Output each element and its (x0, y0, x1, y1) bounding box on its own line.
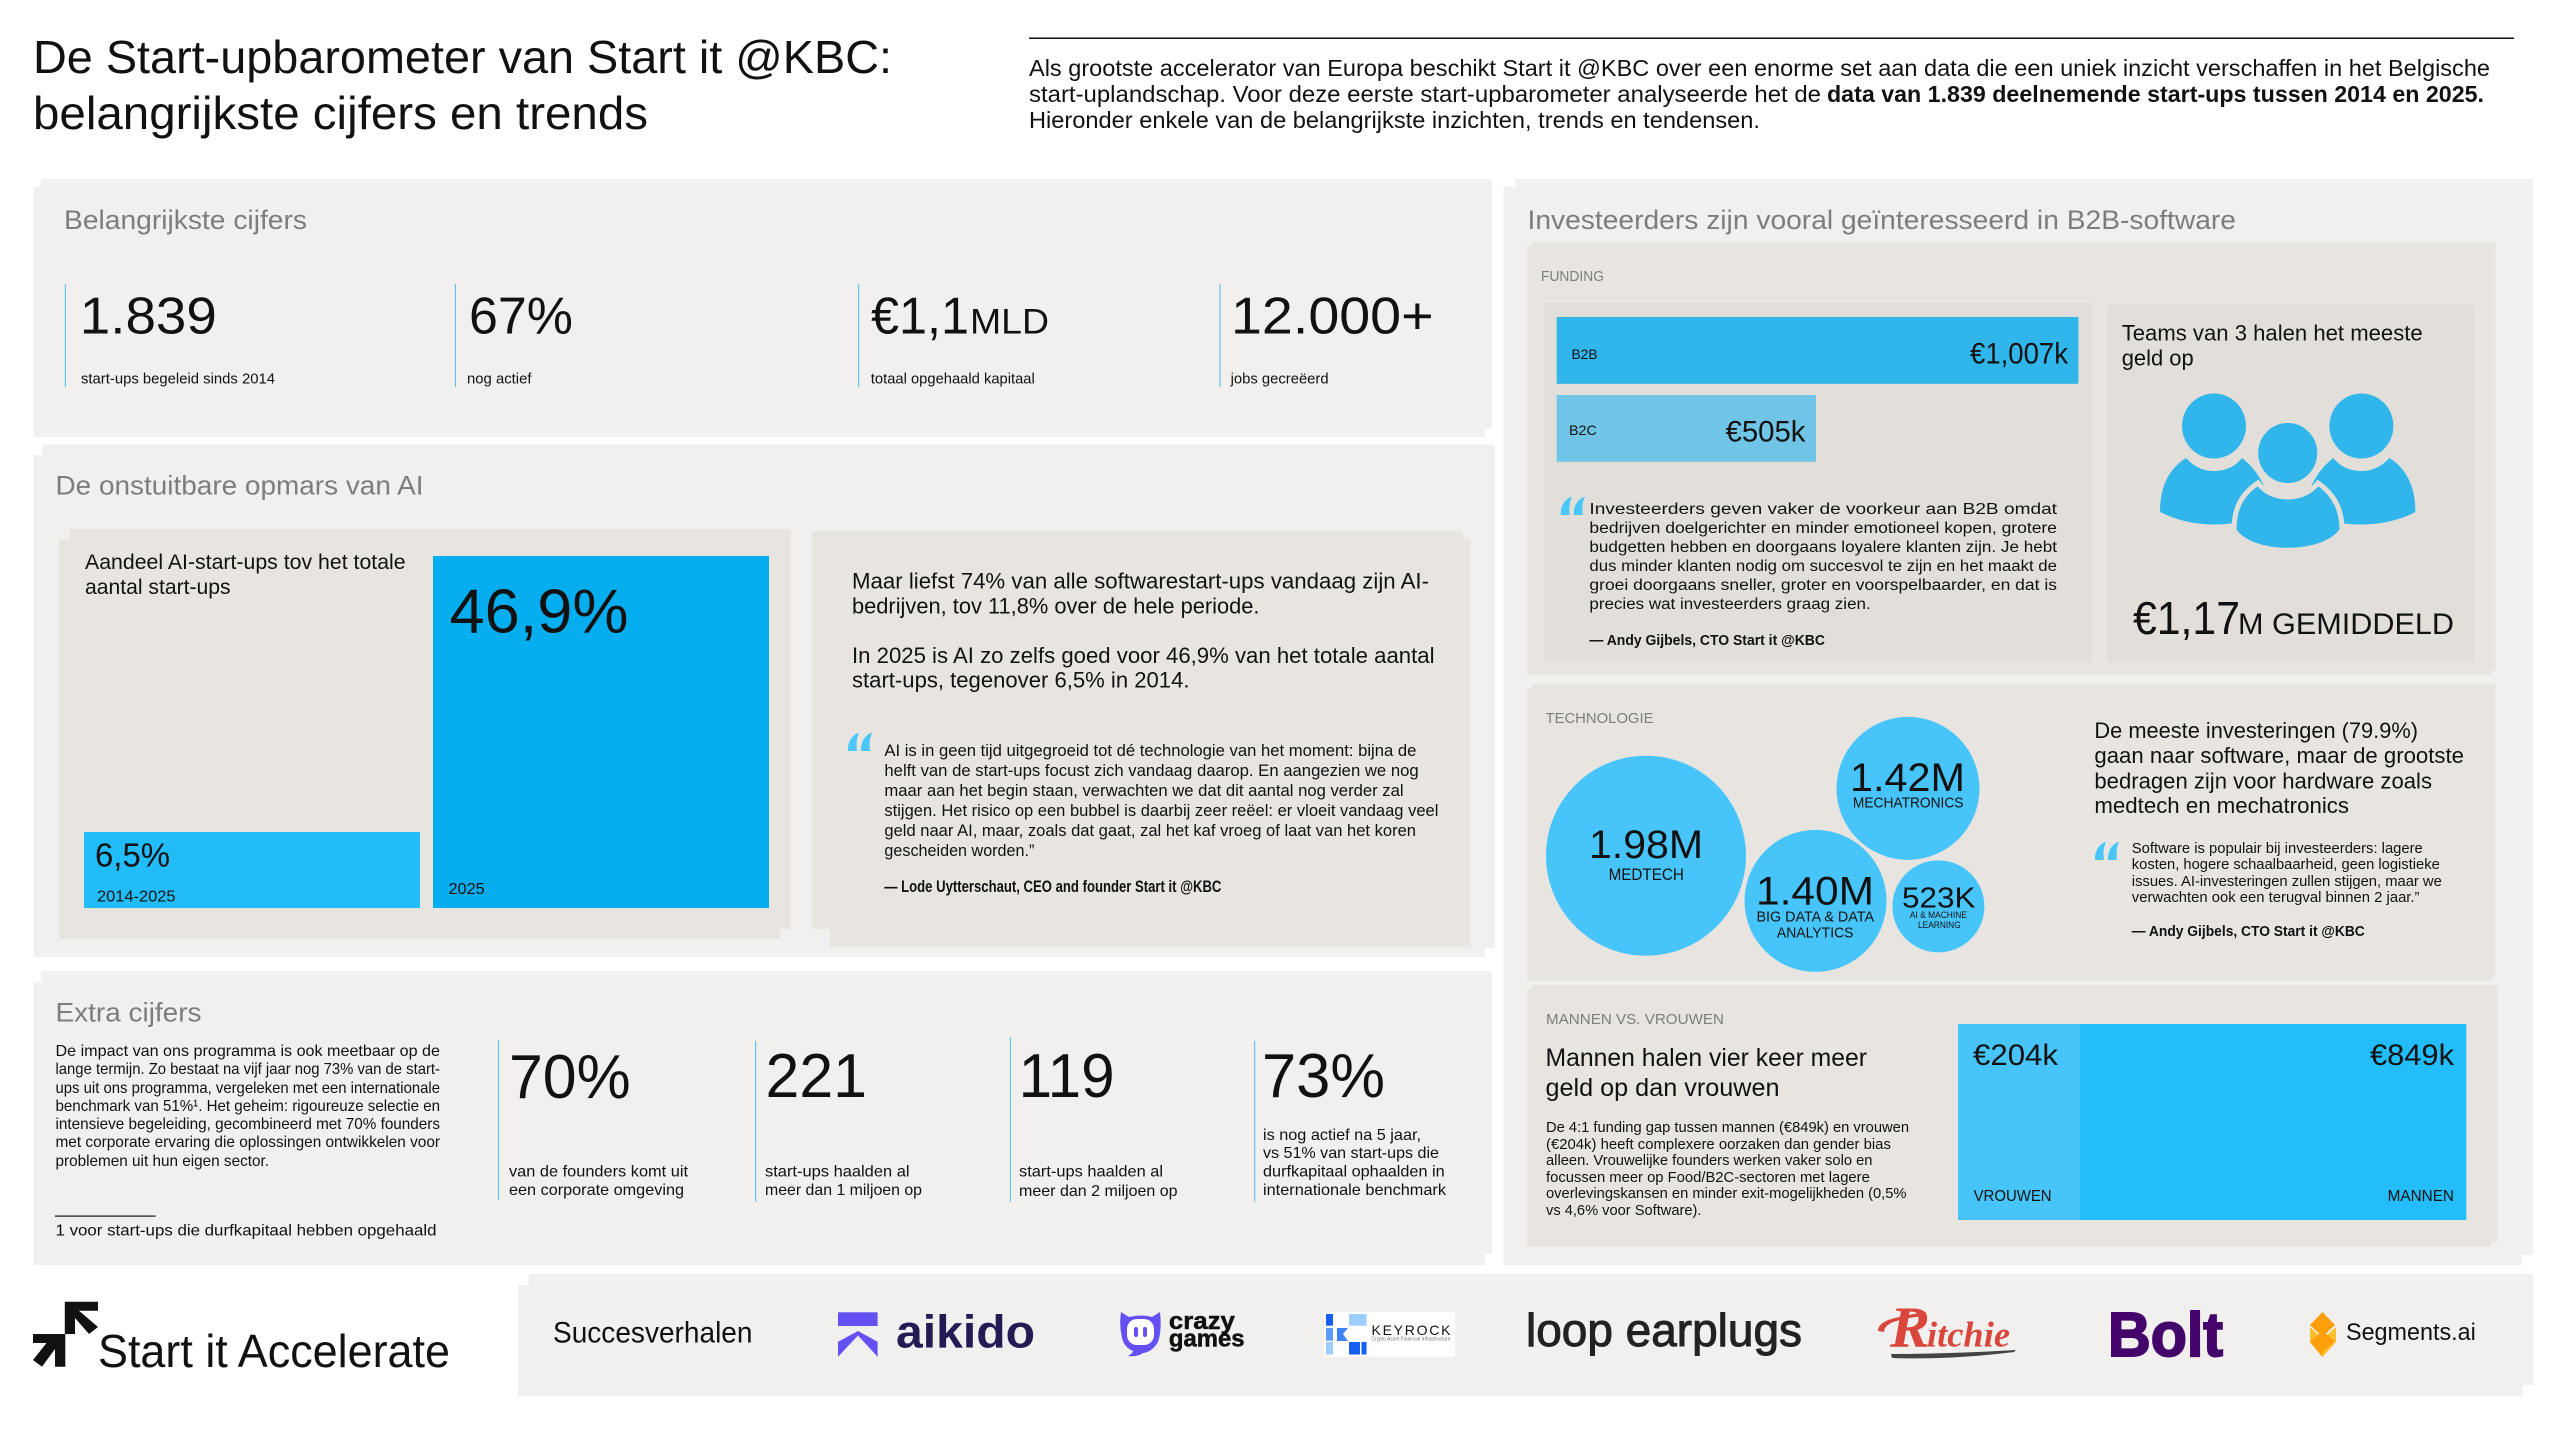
bar: vrouwen (1958, 1024, 2080, 1220)
text: investeringen software (2094, 718, 2464, 818)
stat: 73%: internationale benchmark (1263, 1182, 1447, 1199)
stat: 12.000+: jobs gecreëerd (1230, 371, 1329, 387)
icon: arrows (33, 1302, 98, 1367)
bar: B2B: €1,007k (1970, 337, 2069, 370)
text block: funding gap: De 4:1 funding gap tussen mannen (€849k) en vrouwen (1546, 1119, 1909, 1136)
text block: impact: lange termijn. Zo bestaat na vijf jaar nog 73% van de start- (56, 1061, 440, 1078)
stat: 221: meer dan 1 miljoen op (765, 1182, 922, 1199)
stat: 67% (455, 284, 573, 387)
panel: technologie (1527, 684, 2495, 980)
chart caption: Aandeel AI-start-ups tov het totale (85, 551, 406, 574)
icon: quote mark (848, 733, 872, 751)
text block: funding gap: (€204k) heeft complexere oorzaken dan gender bias (1546, 1136, 1891, 1153)
text: investeringen software: bedragen zijn voor hardware zoals (2094, 768, 2432, 793)
intro text: start-uplandschap. Voor deze eerste start-upbarometer analyseerde het de (1029, 81, 1821, 107)
text block: impact (56, 1043, 441, 1170)
logo: bolt: Bolt (2108, 1301, 2223, 1370)
stat: 70%: een corporate omgeving (509, 1182, 684, 1199)
bubble: big data: ANALYTICS (1777, 924, 1854, 942)
bubble: big data (1744, 830, 1886, 972)
stat: gemiddeld bedrag: €1,17 (2133, 592, 2240, 644)
panel: teams van 3 (2107, 305, 2474, 662)
stat: 1,1 miljard (859, 284, 1049, 387)
bar: B2C: €505k (1726, 416, 1806, 448)
stat: 73%: vs 51% van start-ups die (1263, 1145, 1439, 1162)
stat: gemiddeld bedrag (2133, 592, 2454, 644)
icon: quote mark (2095, 842, 2119, 860)
title: De Start-upbarometer van Start it @KBC: (33, 31, 892, 83)
logo: Start it Accelerate (33, 1302, 450, 1377)
intro text (1029, 38, 2514, 133)
bar: vrouwen: VROUWEN (1974, 1188, 2052, 1205)
panel: funding (1527, 242, 2496, 675)
text block: funding gap: focussen meer op Food/B2C-sectoren met lagere (1546, 1169, 1870, 1186)
bubble: AI: AI & MACHINE (1910, 910, 1967, 921)
intro text: data van 1.839 deelnemende start-ups tussen 2014 en 2025. (1827, 81, 2484, 107)
quote: Andy Gijbels technologie: issues. AI-investeringen zullen stijgen, maar we (2132, 874, 2442, 890)
bar: mannen: MANNEN (2388, 1188, 2454, 1205)
stat: 67%: 67% (469, 287, 573, 345)
logo: keyrock: Crypto Asset Financial Infrastructure (1372, 1336, 1451, 1342)
stat: 70%: 70% (509, 1043, 631, 1112)
bubble: AI: LEARNING (1918, 920, 1961, 931)
stat: 67%: nog actief (467, 371, 532, 387)
text block: impact: problemen uit hun eigen sector. (56, 1153, 269, 1170)
logo: crazy games (1120, 1308, 1244, 1356)
bar: B2B: B2B (1572, 346, 1598, 362)
logo: aikido: aikido (896, 1306, 1035, 1358)
text: teams van 3: Teams van 3 halen het meeste (2122, 320, 2423, 345)
stat: 12.000+: 12.000+ (1231, 287, 1434, 345)
title: belangrijkste cijfers en trends (33, 87, 648, 139)
text block: AI cijfers: start-ups, tegenover 6,5% in 2014. (852, 668, 1190, 693)
text block: funding gap: vs 4,6% voor Software). (1546, 1202, 1702, 1219)
bubble: big data: BIG DATA & DATA (1756, 909, 1874, 926)
quote: Lode Uytterschaut (884, 742, 1438, 896)
quote: Andy Gijbels funding: precies wat investeerders graag zien. (1589, 596, 1871, 613)
heading: mannen halen meer op: geld op dan vrouwen (1546, 1074, 1780, 1102)
bubble: medtech: 1.98M (1589, 823, 1703, 867)
bubble: mechatronics (1836, 717, 1980, 860)
logo: keyrock (1324, 1312, 1455, 1357)
panel: AI toelichting (812, 531, 1470, 947)
stat: 73%: 73% (1262, 1042, 1385, 1111)
label: technologie: TECHNOLOGIE (1546, 711, 1654, 727)
heading: mannen halen meer op: Mannen halen vier keer meer (1546, 1044, 1867, 1072)
bar: B2B (1557, 317, 2078, 384)
heading: extra cijfers: Extra cijfers (56, 998, 202, 1028)
logo: loop earplugs: loop earplugs (1526, 1304, 1802, 1356)
bubble: big data: 1.40M (1756, 870, 1874, 914)
stat: 1,1 miljard: €1,1 (871, 287, 969, 345)
stat: 73%: is nog actief na 5 jaar, (1263, 1127, 1421, 1144)
bar: vrouwen: €204k (1973, 1039, 2059, 1072)
bar: mannen (2080, 1024, 2466, 1220)
quote: Lode Uytterschaut: helft van de start-ups focust zich vandaag daarop. En aangezien we nog (884, 762, 1419, 780)
logo: crazy games: games (1169, 1326, 1244, 1353)
quote: Andy Gijbels funding: — Andy Gijbels, CTO Start it @KBC (1589, 633, 1826, 649)
bar: mannen: €849k (2370, 1039, 2455, 1072)
bubble: AI: 523K (1902, 882, 1976, 914)
bar: 2025 (433, 556, 769, 908)
quote: Andy Gijbels funding: budgetten hebben en doorgaans loyalere klanten zijn. Je hebt (1589, 539, 2058, 556)
text: investeringen software: gaan naar software, maar de grootste (2094, 743, 2464, 768)
bar: B2C: B2C (1569, 422, 1597, 438)
quote: Lode Uytterschaut: — Lode Uytterschaut, CEO and founder Start it @KBC (884, 878, 1221, 896)
text block: AI cijfers: In 2025 is AI zo zelfs goed voor 46,9% van het totale aantal (852, 643, 1434, 668)
bubble: mechatronics: MECHATRONICS (1853, 795, 1964, 812)
stat: 1.839 (65, 284, 275, 387)
quote: Andy Gijbels technologie: kosten, hogere schaalbaarheid, geen logistieke (2132, 857, 2440, 873)
chart caption (85, 551, 406, 599)
stat: 119: 119 (1019, 1042, 1115, 1111)
bar: 2014-2025: 6,5% (95, 837, 170, 874)
stat: 119: start-ups haalden al (1019, 1164, 1163, 1181)
quote: Andy Gijbels technologie (2132, 841, 2442, 940)
panel: succesverhalen (518, 1274, 2533, 1396)
bubble: medtech (1546, 756, 1746, 956)
text block: AI cijfers: bedrijven, tov 11,8% over de hele periode. (852, 593, 1260, 618)
intro text: Hieronder enkele van de belangrijkste inzichten, trends en tendensen. (1029, 107, 1760, 133)
quote: Andy Gijbels funding: groei doorgaans sneller, groter en voorspelbaarder, en dat is (1589, 577, 2057, 594)
logo: keyrock: KEYROCK (1372, 1322, 1451, 1338)
heading: succesverhalen: Succesverhalen (553, 1317, 752, 1350)
text block: funding gap: alleen. Vrouwelijke founders werken vaker solo en (1546, 1152, 1872, 1169)
quote: Lode Uytterschaut: geld naar AI, maar, zoals dat gaat, zal het kaf vroeg of laat van het koren (884, 822, 1416, 840)
quote: Andy Gijbels funding (1589, 501, 2058, 649)
bar: 2025: 2025 (448, 881, 485, 898)
panel: investeerders (1504, 179, 2533, 1265)
stat: 221: 221 (766, 1042, 867, 1111)
label: mannen vs vrouwen: MANNEN VS. VROUWEN (1546, 1012, 1724, 1028)
panel: mannen vs vrouwen (1527, 985, 2498, 1247)
stat: 1,1 miljard: totaal opgehaald kapitaal (871, 371, 1035, 387)
quote: Andy Gijbels funding: Investeerders geven vaker de voorkeur aan B2B omdat (1589, 501, 2058, 518)
quote: Andy Gijbels technologie: Software is populair bij investeerders: lagere (2132, 841, 2423, 857)
panel: belangrijkste cijfers (34, 179, 1492, 437)
logo: segments.ai: Segments.ai (2346, 1319, 2476, 1346)
bar: 2014-2025 (84, 832, 420, 908)
bubble: mechatronics: 1.42M (1850, 756, 1965, 800)
text block: impact: De impact van ons programma is ook meetbaar op de (56, 1043, 440, 1060)
text block: funding gap: overlevingskansen en minder exit-mogelijkheden (0,5% (1546, 1185, 1906, 1202)
heading: mannen halen meer op (1546, 1044, 1867, 1102)
label: funding: FUNDING (1541, 269, 1604, 285)
logo: ritchie: itchie (1927, 1315, 2010, 1355)
title (33, 31, 892, 139)
bubble: medtech: MEDTECH (1609, 866, 1684, 884)
icon: quote mark (1561, 497, 1585, 515)
heading: investeerders: Investeerders zijn vooral geïnteresseerd in B2B-software (1528, 205, 2236, 235)
bubble: AI (1892, 860, 1984, 952)
quote: Andy Gijbels technologie: verwachten ook een terugval binnen 2 jaar.” (2132, 890, 2420, 906)
bar: B2C (1557, 395, 1816, 462)
quote: Lode Uytterschaut: AI is in geen tijd uitgegroeid tot dé technologie van het moment: bijna de (884, 742, 1416, 760)
stat: 119: meer dan 2 miljoen op (1019, 1183, 1178, 1200)
text block: AI cijfers (852, 568, 1434, 693)
text block: funding gap (1546, 1119, 1909, 1219)
footnote: 1 voor start-ups die durfkapitaal hebben opgehaald (56, 1223, 436, 1240)
quote: Andy Gijbels technologie: — Andy Gijbels, CTO Start it @KBC (2132, 924, 2365, 940)
logo: aikido (838, 1306, 1035, 1358)
stat: 73%: durfkapitaal ophaalden in (1263, 1164, 1445, 1181)
quote: Lode Uytterschaut: gescheiden worden.” (884, 842, 1034, 860)
stat: gemiddeld bedrag: M GEMIDDELD (2238, 608, 2454, 641)
text: investeringen software: medtech en mechatronics (2094, 793, 2349, 818)
stat: 119 (1010, 1037, 1178, 1202)
text block: impact: ups uit ons programma, vergeleken met een internationale (56, 1080, 440, 1097)
quote: Andy Gijbels funding: bedrijven doelgerichter en minder emotioneel kopen, grotere (1589, 520, 2057, 537)
heading: belangrijkste cijfers: Belangrijkste cijfers (64, 205, 307, 235)
stat: 70%: van de founders komt uit (509, 1164, 689, 1181)
logo: segments.ai (2310, 1312, 2476, 1357)
text: teams van 3: geld op (2122, 346, 2194, 371)
text block: impact: intensieve begeleiding, gecombineerd met 70% founders (56, 1116, 440, 1133)
quote: Lode Uytterschaut: maar aan het begin staan, verwachten we dat dit aantal nog verder zal (884, 782, 1404, 800)
quote: Lode Uytterschaut: stijgen. Het risico op een bubbel is daarbij zeer reëel: er vloeit vandaag veel (884, 802, 1438, 820)
logo: ritchie (1878, 1295, 2016, 1360)
text block: AI cijfers: Maar liefst 74% van alle softwarestart-ups vandaag zijn AI- (852, 568, 1429, 593)
text block: impact: benchmark van 51%¹. Het geheim: rigoureuze selectie en (56, 1098, 440, 1115)
stat: 12.000+ (1220, 284, 1434, 387)
heading: opmars van AI: De onstuitbare opmars van AI (56, 471, 424, 501)
icon: three people (2160, 394, 2415, 550)
intro text: Als grootste accelerator van Europa beschikt Start it @KBC over een enorme set aan data die een uniek inzicht verschaffen in het Belgische (1029, 55, 2490, 81)
panel: extra cijfers (34, 971, 1492, 1265)
panel: B2B vs B2C (1544, 303, 2092, 662)
logo: crazy games: crazy (1169, 1308, 1236, 1335)
quote: Andy Gijbels funding: dus minder klanten nodig om succesvol te zijn en het maakt de (1589, 558, 2057, 575)
logo: ritchie: R (1889, 1295, 1930, 1360)
stat: 221 (756, 1041, 922, 1202)
stat: 73% (1255, 1041, 1447, 1202)
stat: 1.839: 1.839 (80, 287, 217, 345)
panel: opmars van AI (34, 444, 1495, 957)
chart caption: aantal start-ups (85, 576, 231, 599)
text block: impact: met corporate ervaring die oplossingen ontwikkelen voor (56, 1134, 441, 1151)
logo: Start it Accelerate: Start it Accelerate (98, 1325, 450, 1377)
bar chart: aandeel AI-start-ups (59, 529, 791, 939)
bar: 2014-2025: 2014-2025 (97, 889, 176, 906)
stat: 221: start-ups haalden al (765, 1164, 910, 1181)
stat: 1.839: start-ups begeleid sinds 2014 (81, 371, 275, 387)
bar: 2025: 46,9% (450, 578, 628, 647)
stat: 70% (498, 1040, 689, 1200)
text: teams van 3 (2122, 320, 2423, 371)
text: investeringen software: De meeste investeringen (79.9%) (2094, 718, 2418, 743)
stat: 1,1 miljard: MLD (970, 302, 1049, 341)
